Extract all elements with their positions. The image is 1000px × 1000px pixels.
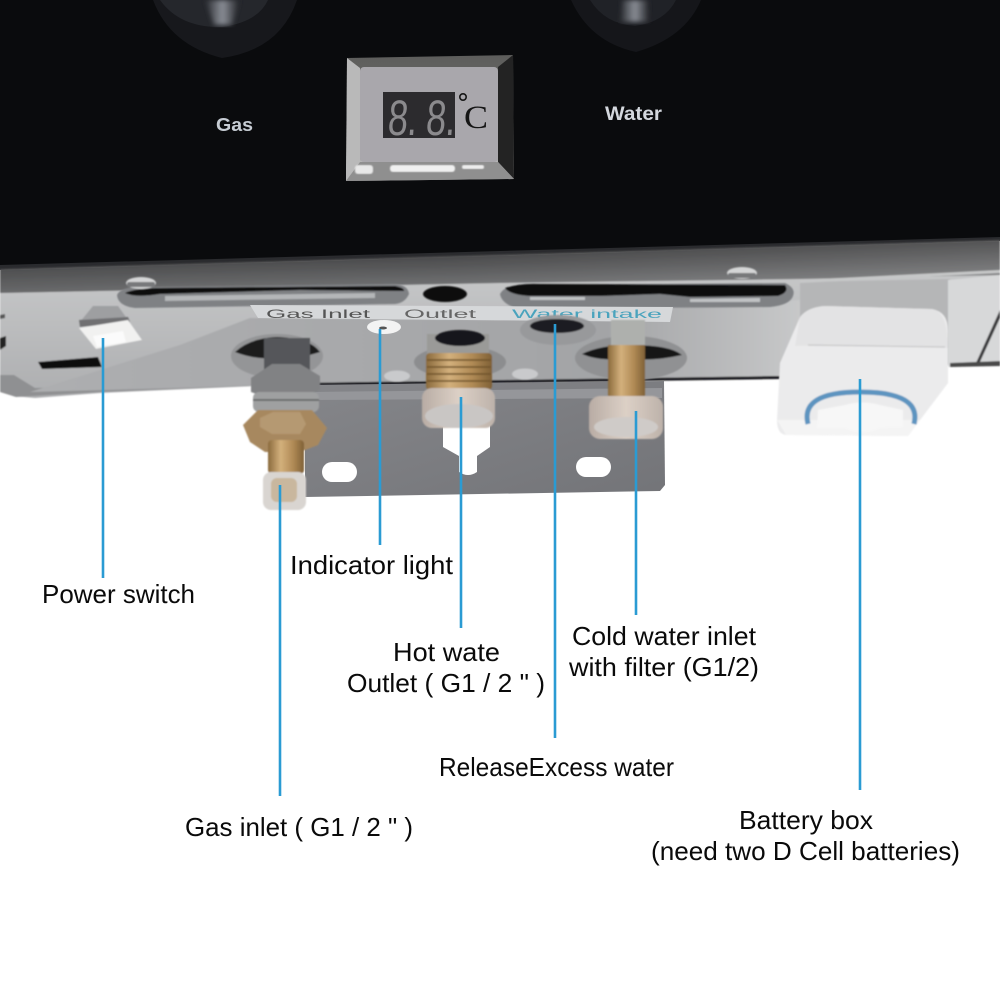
darker central shade	[30, 300, 800, 392]
panel: temperature display	[346, 55, 514, 181]
leader line: battery box	[859, 379, 861, 790]
leader line: gas inlet	[279, 485, 281, 796]
label: cold water inlet	[568, 621, 759, 682]
rivet: left	[126, 277, 156, 289]
small vent hole	[423, 286, 467, 302]
leader line: power switch	[102, 338, 104, 578]
label: gas: Gas	[216, 115, 253, 135]
keyhole	[443, 425, 490, 475]
label: hot water outlet	[347, 637, 545, 698]
label: indicator light: Indicator light	[290, 550, 454, 580]
lower plate	[0, 272, 1000, 398]
icon: release water port	[520, 315, 596, 345]
label: battery box	[651, 805, 960, 866]
leader line: release water	[554, 324, 556, 738]
label: cold water inlet: Cold water inlet	[572, 621, 757, 651]
icon: water knob	[571, 0, 701, 52]
panel: water heater photo	[0, 0, 1000, 510]
leader line: indicator light	[379, 329, 381, 545]
icon: hot water outlet fitting	[414, 330, 506, 428]
rivet: mid right	[512, 368, 538, 380]
panel: label strip	[250, 305, 673, 322]
slot: left	[322, 462, 357, 482]
leader line: hot water	[460, 397, 462, 628]
label: power switch: Power switch	[42, 579, 195, 609]
panel: upper slots	[117, 267, 794, 382]
left slot	[117, 284, 409, 308]
icon: gas knob	[153, 0, 297, 58]
icon: gas inlet fitting	[231, 334, 327, 510]
rivet: right	[727, 267, 757, 279]
label: hot water outlet: Outlet ( G1 / 2 " )	[347, 668, 545, 698]
strip text: water intake: Water intake	[512, 307, 663, 321]
icon: power switch	[79, 306, 142, 349]
right body	[800, 279, 950, 330]
slot: right	[576, 457, 611, 477]
panel: metal body	[0, 240, 1000, 398]
panel: black front glass	[0, 0, 1000, 270]
icon: cold water inlet fitting	[575, 320, 687, 439]
rivet: mid left	[384, 370, 410, 382]
label: hot water outlet: Hot wate	[393, 637, 500, 667]
label: release excess water: ReleaseExcess water	[439, 752, 674, 782]
label: battery box: (need two D Cell batteries)	[651, 836, 960, 866]
label: water: Water	[605, 104, 663, 125]
strip text: outlet: Outlet	[404, 307, 477, 321]
body bottom shadow	[300, 376, 780, 386]
strip text: gas inlet: Gas Inlet	[266, 307, 371, 321]
label: battery box: Battery box	[739, 805, 873, 835]
leader line: cold water	[635, 411, 637, 615]
digits: 8.8.	[386, 90, 458, 146]
icon: battery box	[777, 306, 948, 436]
left lower flange	[0, 375, 250, 397]
icon: indicator light	[367, 320, 401, 334]
degree celsius: C	[464, 100, 488, 136]
label: gas inlet: Gas inlet ( G1 / 2 " )	[185, 812, 413, 842]
panel: mounting bracket	[305, 381, 665, 497]
upper dark band	[0, 240, 1000, 293]
label: cold water inlet: with filter (G1/2)	[568, 652, 759, 682]
right slot	[500, 283, 794, 309]
